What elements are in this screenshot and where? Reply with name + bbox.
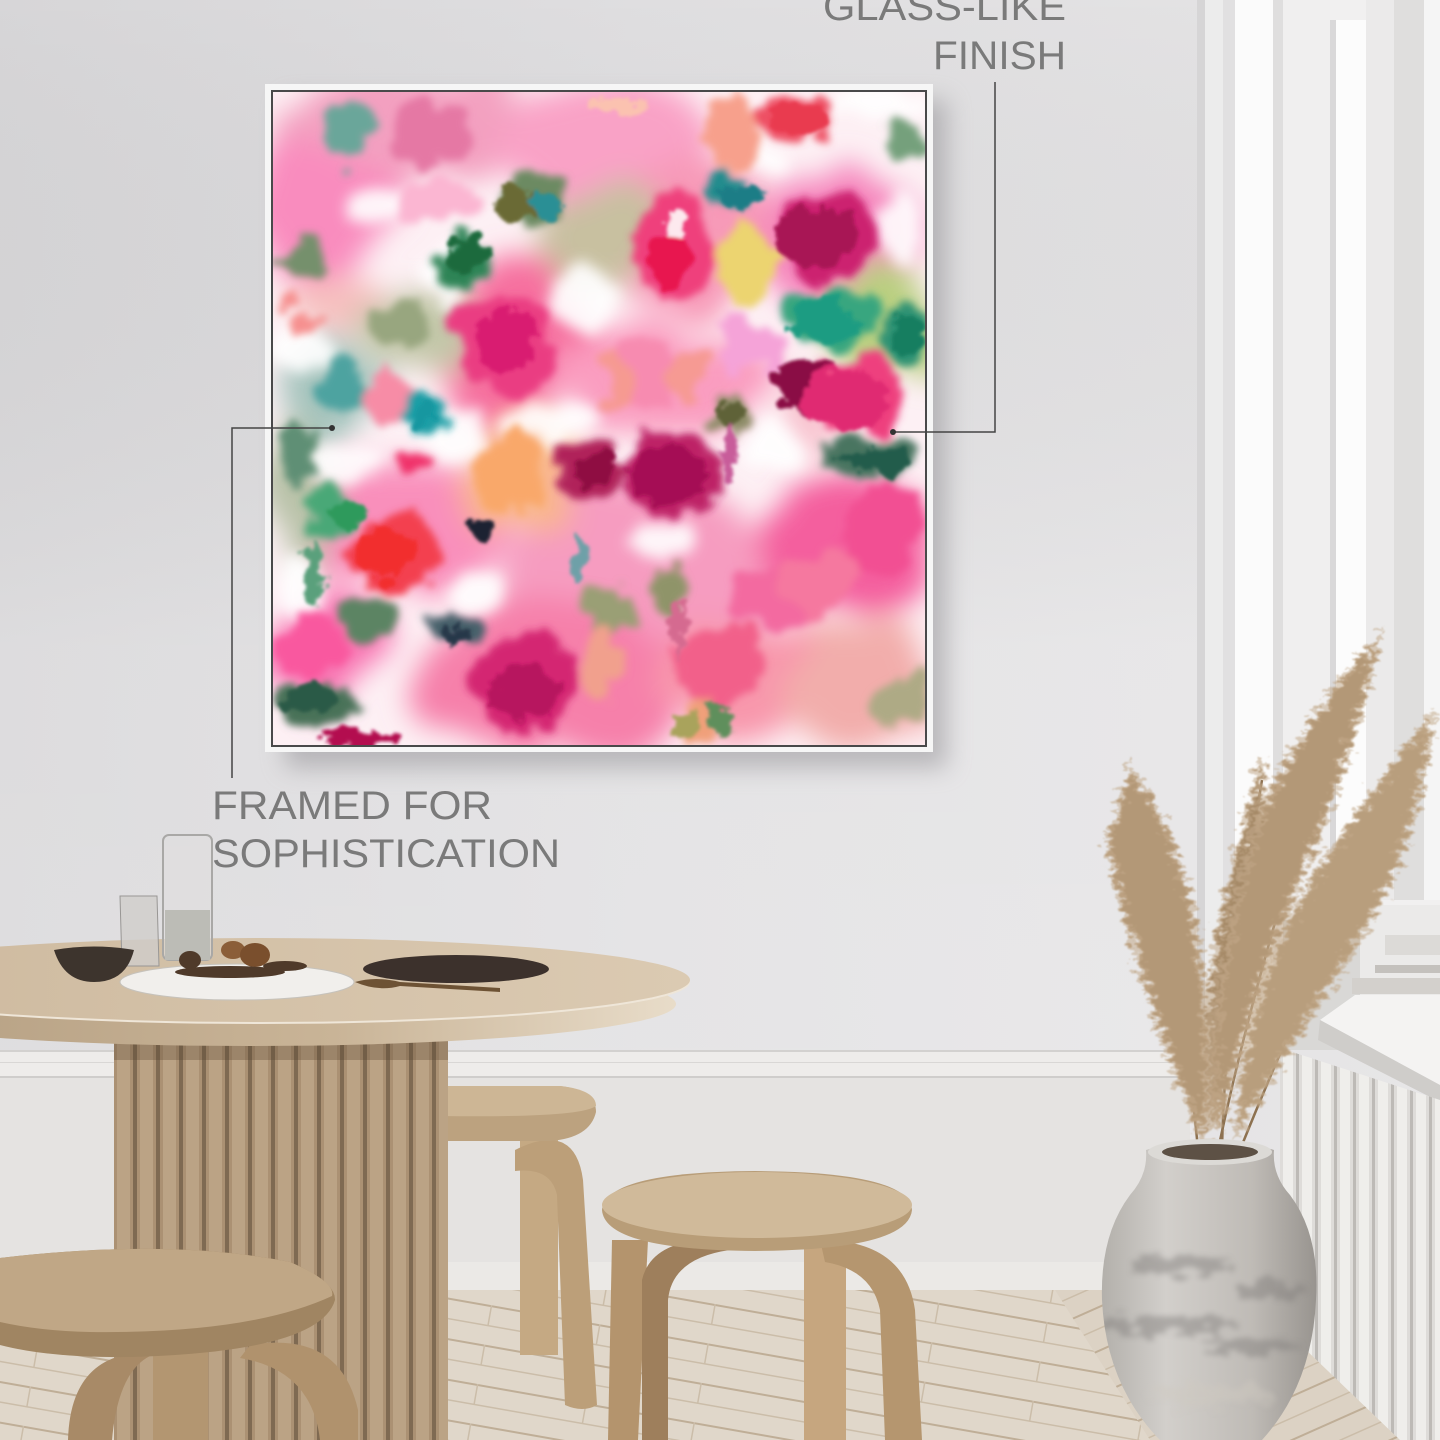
back stool (440, 1086, 597, 1409)
white frame (265, 84, 933, 752)
floral artwork (273, 92, 925, 745)
dining table top (0, 938, 690, 1046)
painting shadow (285, 100, 947, 768)
label: glass-like finish: FINISH (933, 34, 1066, 78)
ceramic vase (1100, 1139, 1316, 1440)
front right stool (602, 1171, 922, 1440)
wainscot moulding (0, 1050, 1190, 1290)
marble plate (120, 964, 354, 1000)
framed floral painting (250, 70, 945, 755)
glass carafe (163, 835, 212, 960)
pampas grass (1108, 640, 1430, 1150)
floor (0, 1290, 1440, 1440)
dark wood tray (363, 955, 549, 983)
leader line: glass-like finish (890, 82, 995, 435)
window and radiator (1197, 0, 1440, 1440)
leader line: framed (232, 425, 335, 778)
soft white paper areas (274, 91, 924, 620)
tableware (54, 835, 549, 1000)
drinking glass (120, 896, 159, 966)
label: framed for sophistication: SOPHISTICATION (212, 832, 560, 876)
dark bowl (54, 946, 134, 982)
label: framed for sophistication: FRAMED FOR (212, 784, 492, 828)
front left stool (0, 1249, 358, 1440)
nuts (175, 941, 307, 978)
table pedestal (114, 1030, 448, 1440)
spoon (355, 979, 500, 992)
